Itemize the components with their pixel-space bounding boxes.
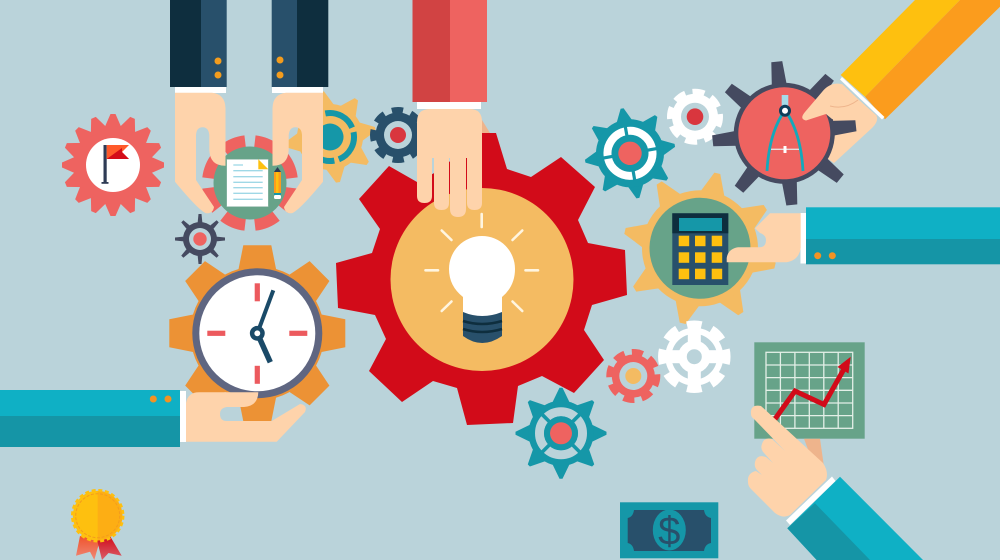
icon: flag [102, 145, 129, 184]
clock tick marks [207, 283, 307, 384]
gear: yellow with teal rings [277, 84, 383, 190]
arm: left navy sleeve and hand [170, 0, 227, 213]
gear: small navy [374, 110, 422, 160]
arm: teal sleeve and hand on calculator [727, 207, 1000, 264]
icon: document [227, 159, 268, 207]
gear: large red with light bulb [336, 133, 627, 425]
gear: small dark grey [175, 214, 225, 264]
gear: document [208, 141, 292, 225]
arm: teal diagonal sleeve and pointing hand [748, 406, 923, 560]
gear: white large [663, 326, 725, 388]
gear: compass [705, 54, 863, 212]
arm: yellow sleeve with pointing finger [802, 0, 1000, 120]
gear: white upper [670, 92, 720, 141]
chart: growth line on green board [754, 342, 865, 439]
icon: dollar banknote: $ [658, 510, 680, 554]
clock hands [252, 290, 273, 362]
icon: pencil [274, 167, 281, 199]
icon: drawing compass [767, 95, 803, 171]
icon: dollar banknote [620, 502, 718, 558]
arm: yellow sleeve hand back [815, 84, 877, 163]
icon: award medal [72, 490, 123, 560]
arm: red sleeve and hand on big gear [412, 0, 490, 217]
icon: calculator [672, 213, 728, 285]
gear: teal upper [577, 101, 683, 206]
arm: hand holding clock from left [0, 390, 306, 447]
gear: flag [62, 114, 164, 216]
arm: right navy sleeve and hand [272, 0, 328, 213]
gear: coral small [610, 352, 657, 400]
gear: clock [169, 245, 345, 421]
gear: teal lower [516, 388, 606, 479]
gear: calculator [608, 156, 792, 341]
icon: light bulb [426, 214, 538, 343]
